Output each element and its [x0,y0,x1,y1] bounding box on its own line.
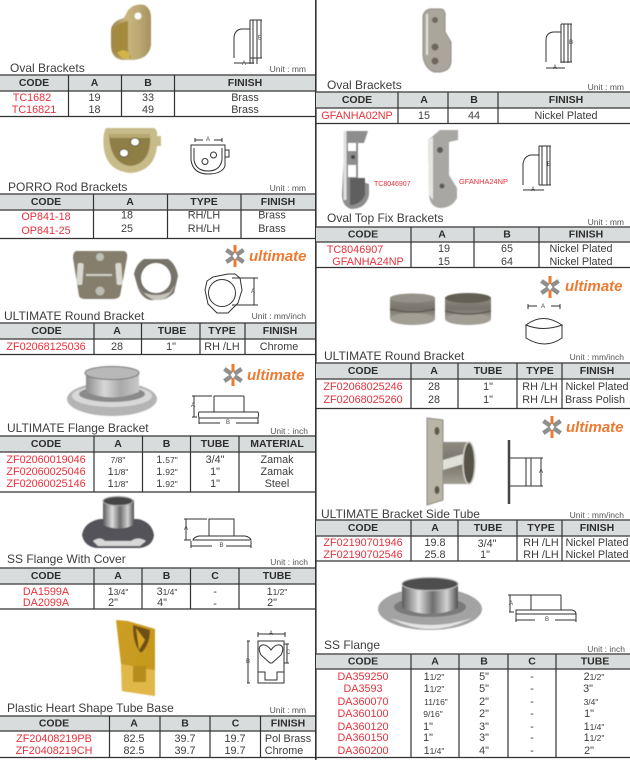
table: ULTIMATE Round Bracket nickel: TYPE [526,365,554,377]
table: SS Flange: 11/2" [584,732,604,744]
photo: ss flange with cover [82,496,154,548]
heading: ULTIMATE Bracket Side Tube: ULTIMATE Bracket Side Tube [321,507,480,521]
photo: nickel oval bracket [423,9,451,72]
diagram: flange bracket: B [226,420,230,426]
table: PORRO Rod Brackets: A [126,196,134,208]
photo: heart tube base [116,620,155,696]
table: PORRO Rod Brackets: 18 [121,210,133,222]
photo: porro bracket [103,128,161,173]
diagram: oval bracket: A [242,61,246,67]
table: ULTIMATE Bracket Side Tube: RH /LH [523,549,559,561]
table: Oval Brackets nickel: 15 [418,110,430,122]
panel: Oval Top Fix Brackets [316,130,630,268]
table: ULTIMATE Bracket Side Tube: 3/4" [478,538,497,550]
label: TC8046907: TC8046907 [374,181,411,188]
diagram: porro bracket [191,137,229,174]
table: Plastic Heart Shape Tube Base: 82.5 [123,745,145,757]
table: Oval Top Fix Brackets: Nickel Plated [549,256,613,268]
table: ULTIMATE Flange Bracket: TUBE [201,438,229,450]
diagram: round bracket [205,274,258,313]
table: ULTIMATE Bracket Side Tube: ZF02190702546 [323,549,403,561]
table: ULTIMATE Bracket Side Tube: A [431,522,439,534]
diagram: ss flange with cover: B [219,543,224,549]
table: ULTIMATE Round Bracket nickel: 28 [428,381,440,393]
unit label: Unit : mm [270,64,306,74]
table: SS Flange With Cover: 11/2" [267,586,287,598]
photo: ss flange [378,578,482,630]
table: ULTIMATE Flange Bracket: 3/4" [206,454,225,466]
table: SS Flange: 5" [479,683,489,695]
table: ULTIMATE Round Bracket: 1" [166,341,176,353]
table: SS Flange: 1" [584,708,594,720]
table: Oval Top Fix Brackets [316,227,630,268]
photo: top fix bracket TC8046907 [342,131,369,209]
table: ULTIMATE Bracket Side Tube [316,520,630,561]
panel: Oval Brackets (brass) [0,5,315,116]
table: ULTIMATE Flange Bracket: Zamak [260,466,294,478]
heading: SS Flange: SS Flange [324,638,380,652]
table: Plastic Heart Shape Tube Base: Chrome [265,745,303,757]
table: ULTIMATE Flange Bracket: Steel [265,478,289,490]
table: ULTIMATE Flange Bracket: ZF02060019046 [6,454,86,466]
diagram: heart tube base: C [286,650,291,656]
table: Plastic Heart Shape Tube Base: 39.7 [174,733,196,745]
photo: round bracket ring [134,259,178,300]
photo: round bracket plate [73,251,127,299]
table: ULTIMATE Round Bracket: 28 [111,341,123,353]
panel: ULTIMATE Bracket Side Tube [316,416,630,561]
panel: Oval Brackets (nickel) [316,9,630,124]
table: SS Flange With Cover: - [213,586,217,598]
table: Oval Brackets: Brass [231,104,259,116]
table: SS Flange: A [431,656,439,668]
centre column divider [315,0,317,760]
table: PORRO Rod Brackets: Brass [258,210,286,222]
table: ULTIMATE Flange Bracket: 1.92" [156,478,178,490]
diagram: side tube: A [539,469,543,475]
table: ULTIMATE Round Bracket: FINISH [263,325,297,337]
table: SS Flange: 3" [479,721,489,733]
heading: SS Flange With Cover: SS Flange With Cover [7,552,126,566]
diagram: ss flange: B [545,617,549,623]
logo: ultimate [225,245,307,267]
table: PORRO Rod Brackets: RH/LH [188,210,220,222]
table: ULTIMATE Round Bracket: A [113,325,121,337]
heading: Oval Brackets: Oval Brackets [10,61,85,75]
table: ULTIMATE Round Bracket nickel: A [430,365,438,377]
heading: Plastic Heart Shape Tube Base: Plastic Heart Shape Tube Base [7,701,174,715]
table: ULTIMATE Flange Bracket: 7/8" [111,455,125,465]
photo: flange bracket [67,366,157,416]
table: SS Flange: 9/16" [423,709,443,719]
heading: ULTIMATE Round Bracket: ULTIMATE Round Bracket [4,309,145,323]
table: ULTIMATE Round Bracket: TUBE [158,325,186,337]
heading: ULTIMATE Flange Bracket: ULTIMATE Flange Bracket [7,421,149,435]
diagram: ss flange [508,595,576,623]
table: ULTIMATE Flange Bracket: 1" [210,478,220,490]
table: SS Flange: DA360070 [337,696,389,708]
table: SS Flange: 1" [423,721,433,733]
logo: ultimate [223,364,305,386]
table: PORRO Rod Brackets: RH/LH [188,223,220,235]
table: ULTIMATE Round Bracket: CODE [31,325,62,337]
table: Oval Brackets nickel: 44 [468,110,480,122]
table: SS Flange: 3" [479,732,489,744]
table: ULTIMATE Round Bracket nickel [316,363,630,408]
table: SS Flange: TUBE [581,656,609,668]
table: SS Flange With Cover: 2" [267,597,277,609]
table: Oval Top Fix Brackets: 65 [501,243,513,255]
table: SS Flange With Cover: A [114,570,122,582]
table: Plastic Heart Shape Tube Base: ZF20408219PB [16,733,92,745]
unit label: Unit : mm [270,705,306,715]
table: ULTIMATE Flange Bracket: CODE [31,438,61,450]
table: SS Flange With Cover: - [213,598,217,610]
table: SS Flange: 5" [479,671,489,683]
heading: PORRO Rod Brackets: PORRO Rod Brackets [8,180,127,194]
table: SS Flange: 11/2" [424,671,444,683]
table: SS Flange: 11/2" [424,683,444,695]
table: SS Flange: 21/2" [584,671,604,683]
table: Plastic Heart Shape Tube Base: B [181,718,189,730]
unit label: Unit : inch [587,644,625,654]
table: ULTIMATE Round Bracket: ZF02068125036 [6,341,86,353]
table: PORRO Rod Brackets: Brass [258,223,286,235]
table: ULTIMATE Round Bracket nickel: FINISH [580,365,614,377]
table: Oval Brackets nickel: FINISH [549,94,583,106]
photo: brass oval bracket [111,5,151,60]
table: ULTIMATE Flange Bracket: Zamak [260,454,294,466]
table: ULTIMATE Round Bracket nickel: 28 [428,394,440,406]
unit label: Unit : mm/inch [570,352,624,362]
table: SS Flange: DA359250 [337,671,389,683]
table: ULTIMATE Flange Bracket: 11/8" [108,466,128,478]
table: SS Flange: DA360200 [337,745,389,757]
table: PORRO Rod Brackets: OP841-25 [21,225,71,237]
logo: ultimate: ultimate [566,419,624,436]
table: ULTIMATE Round Bracket: RH /LH [204,341,240,353]
diagram: nickel oval bracket [546,24,573,71]
table: PORRO Rod Brackets: 25 [121,223,133,235]
panel: ULTIMATE Round Bracket (nickel) [316,276,630,408]
unit label: Unit : mm/inch [570,510,624,520]
panel: ULTIMATE Flange Bracket [0,364,315,492]
table: ULTIMATE Round Bracket: Chrome [260,341,298,353]
table: ULTIMATE Round Bracket nickel: CODE [348,365,378,377]
table: ULTIMATE Round Bracket nickel: RH /LH [522,381,558,393]
table: ULTIMATE Flange Bracket: B [163,438,171,450]
diagram: ss flange: A [509,601,513,607]
table: PORRO Rod Brackets: CODE [31,196,61,208]
diagram: oval bracket [234,20,262,67]
table: SS Flange: 11/4" [424,745,444,757]
table: Oval Brackets: 19 [88,92,101,104]
table: SS Flange: 2" [479,708,489,720]
panel: Plastic Heart Shape Tube Base [0,620,315,758]
table: Plastic Heart Shape Tube Base: A [130,718,138,730]
table: SS Flange: 11/4" [584,721,604,733]
table: Oval Brackets: TC16821 [12,104,56,116]
table: ULTIMATE Bracket Side Tube: 19.8 [424,537,446,549]
table: SS Flange: CODE [348,656,378,668]
table: SS Flange: 4" [479,745,489,757]
label: GFANHA24NP: GFANHA24NP [459,177,508,186]
table: ULTIMATE Flange Bracket: ZF02060025146 [6,478,86,490]
logo: ultimate [542,416,624,438]
table: ULTIMATE Bracket Side Tube: 25.8 [424,549,446,561]
table: ULTIMATE Bracket Side Tube: ZF02190701946 [323,537,403,549]
table: Plastic Heart Shape Tube Base: 39.7 [174,745,196,757]
table: Oval Brackets nickel: CODE [342,94,372,106]
heading: ULTIMATE Round Bracket: ULTIMATE Round Bracket [324,349,465,363]
table: ULTIMATE Round Bracket nickel: ZF02068025246 [323,381,403,393]
table: Oval Top Fix Brackets: A [438,228,446,240]
table: Oval Brackets: 18 [88,104,101,116]
table: SS Flange With Cover: C [211,570,219,582]
diagram: round cap: A [541,304,545,310]
table: Plastic Heart Shape Tube Base [0,716,315,758]
table: SS Flange: C [528,656,536,668]
table: ULTIMATE Round Bracket nickel: ZF02068025260 [323,394,403,406]
table: Oval Brackets [0,75,315,116]
table: ULTIMATE Round Bracket nickel: Brass Polish [565,394,625,406]
unit label: Unit : mm [270,183,306,193]
table: Oval Top Fix Brackets: 19 [438,243,450,255]
table: SS Flange: 3" [583,683,593,695]
table: Plastic Heart Shape Tube Base: FINISH [271,718,305,730]
table: ULTIMATE Round Bracket [0,323,315,354]
table: SS Flange: 11/16" [424,697,448,707]
heading: Oval Brackets: Oval Brackets [327,78,402,92]
unit label: Unit : inch [270,426,308,436]
table: ULTIMATE Round Bracket nickel: 1" [483,394,493,406]
photo: top fix bracket GFANHA24NP [428,130,458,208]
table: ULTIMATE Bracket Side Tube: TYPE [527,522,555,534]
table: SS Flange [316,654,630,758]
table: PORRO Rod Brackets: FINISH [261,196,295,208]
table: Plastic Heart Shape Tube Base: 19.7 [224,745,246,757]
table: SS Flange: 1" [423,732,433,744]
table: Oval Brackets: A [91,77,99,89]
table: Oval Top Fix Brackets: Nickel Plated [549,243,613,255]
panel: PORRO Rod Brackets [0,128,315,238]
table: SS Flange With Cover: TUBE [263,570,291,582]
table: SS Flange With Cover: 4" [157,597,167,609]
table: SS Flange: - [530,683,534,695]
table: Oval Brackets nickel: B [470,94,478,106]
table: ULTIMATE Flange Bracket: 1.92" [156,466,178,478]
table: Oval Brackets nickel: GFANHA02NP [321,110,393,122]
table: SS Flange With Cover: CODE [31,570,61,582]
table: SS Flange: 2" [584,745,594,757]
table: SS Flange With Cover: DA1599A [23,586,70,598]
table: SS Flange With Cover [0,568,315,610]
table: Oval Brackets: 49 [142,104,154,116]
table: ULTIMATE Bracket Side Tube: RH /LH [523,537,559,549]
logo: ultimate: ultimate [249,248,307,265]
table: Oval Top Fix Brackets: GFANHA24NP [332,256,404,268]
table: SS Flange: - [530,732,534,744]
table: PORRO Rod Brackets: TYPE [190,196,218,208]
diagram: top fix bracket: A [531,187,535,193]
table: Oval Brackets nickel: A [420,94,428,106]
diagram: porro bracket: A [206,137,210,143]
table: ULTIMATE Bracket Side Tube: 1" [480,549,490,561]
table: Oval Brackets: B [144,77,152,89]
table: ULTIMATE Bracket Side Tube: Nickel Plated [565,549,629,561]
table: Plastic Heart Shape Tube Base: CODE [39,718,69,730]
table: ULTIMATE Bracket Side Tube: CODE [348,522,378,534]
table: ULTIMATE Round Bracket nickel: Nickel Plated [565,381,629,393]
table: ULTIMATE Round Bracket nickel: 1" [483,381,493,393]
unit label: Unit : mm [588,82,624,92]
table: Plastic Heart Shape Tube Base: C [232,718,240,730]
diagram: top fix bracket: B [547,162,551,168]
table: SS Flange: 2" [479,696,489,708]
unit label: Unit : inch [270,557,308,567]
table: SS Flange With Cover: 2" [108,597,118,609]
table: Oval Top Fix Brackets: FINISH [569,228,603,240]
table: SS Flange With Cover: 13/4" [108,586,128,598]
table: ULTIMATE Bracket Side Tube: TUBE [474,522,502,534]
panel: SS Flange [316,578,630,758]
diagram: round cap [526,304,562,344]
panel: SS Flange With Cover [0,496,315,610]
heading: Oval Top Fix Brackets: Oval Top Fix Brackets [327,211,443,225]
table: ULTIMATE Flange Bracket: A [114,438,122,450]
table: Oval Brackets nickel [316,92,630,124]
photo: round bracket rings [390,293,491,325]
table: Plastic Heart Shape Tube Base: 82.5 [123,733,145,745]
table: ULTIMATE Flange Bracket: 11/8" [108,478,128,490]
diagram: top fix bracket [523,146,551,193]
table: ULTIMATE Flange Bracket: 1.57" [156,454,178,466]
table: Oval Brackets nickel: Nickel Plated [534,110,598,122]
table: Plastic Heart Shape Tube Base: Pol Brass [265,733,312,745]
logo: ultimate: ultimate [247,367,305,384]
table: SS Flange With Cover: 31/4" [157,586,177,598]
diagram: heart tube base: A [269,631,273,637]
table: ULTIMATE Bracket Side Tube: FINISH [580,522,614,534]
table: SS Flange: DA360150 [337,732,389,744]
table: SS Flange: - [530,708,534,720]
diagram: flange bracket [191,396,258,426]
table: SS Flange: - [530,671,534,683]
table: SS Flange: DA360100 [337,708,389,720]
panel: ULTIMATE Round Bracket (chrome) [0,245,315,354]
table: SS Flange: - [530,745,534,757]
table: Oval Brackets: 33 [142,92,154,104]
diagram: flange bracket: A [191,403,195,409]
table: ULTIMATE Flange Bracket: 1" [210,466,220,478]
logo: ultimate: ultimate [565,278,623,295]
table: Oval Top Fix Brackets: CODE [348,228,378,240]
table: Oval Top Fix Brackets: 64 [501,256,513,268]
table: SS Flange With Cover: DA2099A [23,597,70,609]
table: Plastic Heart Shape Tube Base: ZF20408219CH [16,745,92,757]
table: Oval Top Fix Brackets: B [503,228,511,240]
diagram: nickel oval bracket: A [553,65,557,71]
table: Oval Brackets: Brass [231,92,259,104]
table: ULTIMATE Round Bracket nickel: RH /LH [522,394,558,406]
table: SS Flange: 3/4" [584,697,598,707]
table: Oval Top Fix Brackets: 15 [438,256,450,268]
diagram: oval bracket: B [258,36,262,42]
table: PORRO Rod Brackets: OP841-18 [21,211,71,223]
photo: bracket side tube [427,418,475,505]
table: SS Flange: DA3593 [343,683,383,695]
table: ULTIMATE Flange Bracket: MATERIAL [250,438,304,450]
table: Oval Top Fix Brackets: TC8046907 [327,244,383,256]
table: ULTIMATE Flange Bracket: ZF02060025046 [6,466,86,478]
diagram: nickel oval bracket: B [569,40,573,46]
table: Oval Brackets: FINISH [228,77,262,89]
table: SS Flange: B [480,656,488,668]
table: SS Flange: - [530,721,534,733]
unit label: Unit : mm [588,217,624,227]
diagram: heart tube base: B [246,659,250,665]
diagram: side tube [509,440,543,504]
table: Oval Brackets: CODE [19,77,49,89]
table: SS Flange: DA360120 [337,721,389,733]
table: SS Flange: - [530,696,534,708]
diagram: ss flange with cover [184,519,251,549]
table: ULTIMATE Round Bracket nickel: TUBE [474,365,502,377]
table: Oval Brackets: TC1682 [13,92,51,104]
table: Plastic Heart Shape Tube Base: 19.7 [224,733,246,745]
diagram: heart tube base [246,631,291,683]
diagram: ss flange with cover: A [184,526,188,532]
diagram: round bracket: A [251,289,255,295]
table: ULTIMATE Round Bracket: TYPE [208,325,236,337]
table: SS Flange With Cover: B [163,570,171,582]
table: ULTIMATE Flange Bracket [0,436,315,492]
unit label: Unit : mm/inch [252,311,306,321]
logo: ultimate [540,276,623,298]
table: ULTIMATE Bracket Side Tube: Nickel Plated [565,537,629,549]
table: PORRO Rod Brackets [0,194,315,238]
